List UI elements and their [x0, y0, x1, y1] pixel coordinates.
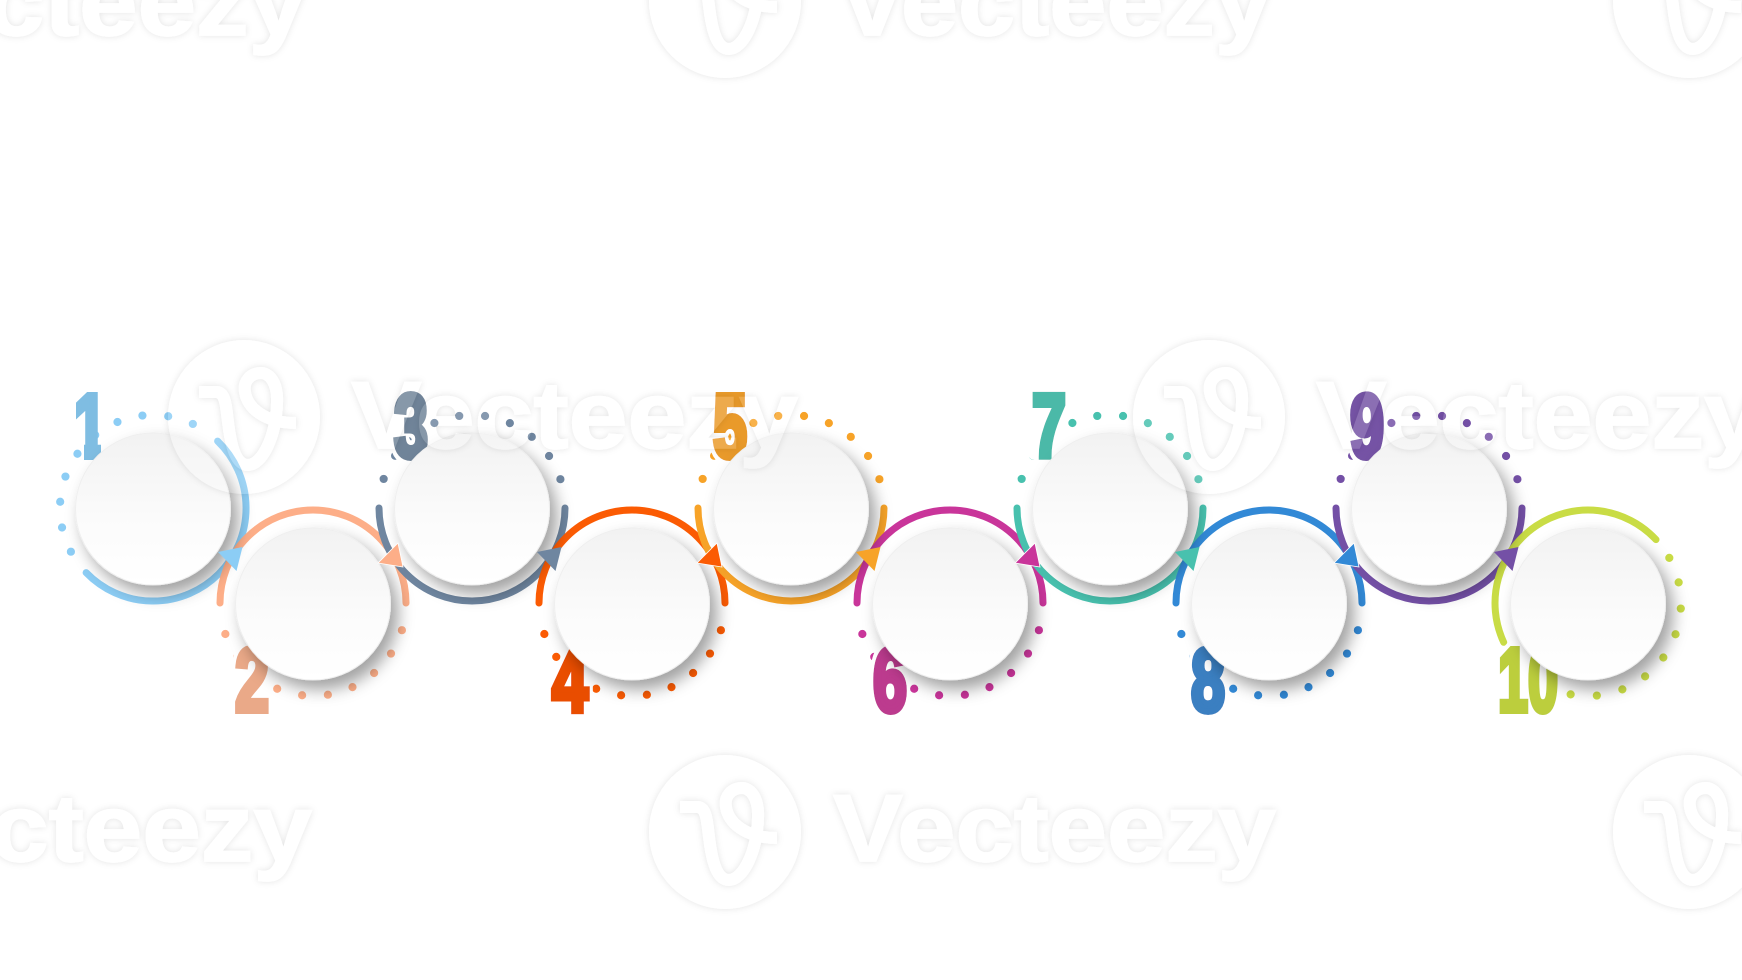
- ring 7: solid arc and dots: [1017, 415, 1203, 601]
- disk 6: [872, 528, 1028, 680]
- disk 9: [1352, 433, 1506, 585]
- number 9: 9: [1350, 376, 1384, 477]
- disk 1: [76, 433, 230, 585]
- arrow: step 1 to step 2: [218, 547, 242, 571]
- arrow: step 8 to step 9: [1334, 543, 1359, 567]
- arrow: step 5 to step 6: [856, 547, 880, 571]
- watermark logo: middle left: [168, 340, 320, 494]
- number 3: 3: [394, 376, 428, 477]
- arrow: step 4 to step 5: [697, 543, 722, 567]
- arrow: step 2 to step 3: [378, 543, 403, 567]
- number 2: 2: [235, 630, 269, 731]
- ring 8: solid arc and dots: [1176, 510, 1362, 696]
- watermark logo: top centre: [649, 0, 801, 78]
- watermark word: middle right: Vecteezy: [1316, 362, 1742, 469]
- number 10: 10: [1498, 630, 1558, 730]
- arrow: step 7 to step 8: [1175, 547, 1200, 571]
- number 1: 1: [73, 376, 107, 477]
- watermark logo: bottom centre: [649, 755, 801, 909]
- disk 8: [1192, 528, 1346, 680]
- number 4: 4: [552, 630, 588, 731]
- number 6: 6: [873, 630, 907, 731]
- ring 10: solid arc and dots: [1495, 510, 1681, 696]
- ring 4: solid arc and dots: [539, 510, 725, 696]
- ring 9: solid arc and dots: [1336, 415, 1522, 601]
- number 8: 8: [1191, 630, 1225, 731]
- arrow: step 9 to step 10: [1494, 547, 1518, 571]
- disk 10: [1510, 528, 1666, 680]
- watermark word: bottom centre: Vecteezy: [833, 775, 1276, 882]
- number 7: 7: [1032, 376, 1066, 477]
- disk 3: [394, 433, 550, 585]
- ring 1: solid arc and dots: [60, 415, 246, 601]
- watermark logo: top right: [1613, 0, 1742, 78]
- ring 2: solid arc and dots: [220, 510, 406, 696]
- ring 5: solid arc and dots: [698, 415, 884, 601]
- watermark logo: bottom right: [1613, 755, 1742, 909]
- ring 6: solid arc and dots: [857, 510, 1043, 696]
- ring 3: solid arc and dots: [379, 415, 565, 601]
- number 5: 5: [713, 376, 747, 477]
- arrow: step 6 to step 7: [1015, 543, 1040, 567]
- arrow: step 3 to step 4: [537, 547, 562, 571]
- disk 4: [554, 528, 710, 680]
- disk 5: [714, 433, 868, 585]
- disk 2: [236, 528, 390, 680]
- disk 7: [1032, 433, 1188, 585]
- watermark word: middle left: Vecteezy: [351, 362, 798, 469]
- watermark logo: middle right: [1133, 340, 1285, 494]
